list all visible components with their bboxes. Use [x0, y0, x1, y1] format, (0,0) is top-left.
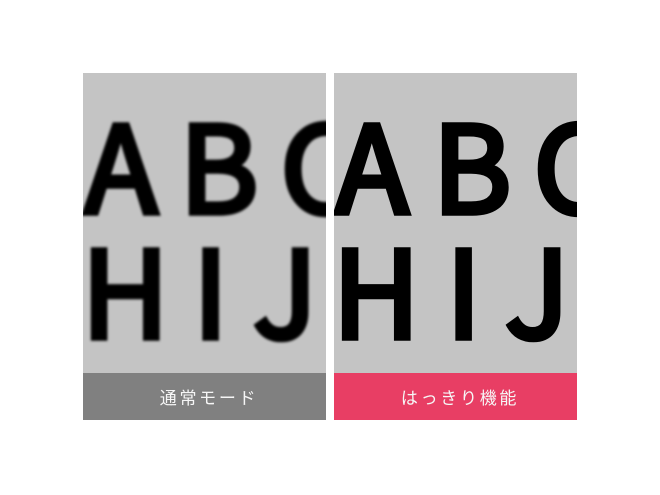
sharp letters: A [336, 74, 408, 248]
label: normal mode [83, 373, 326, 420]
blurred letters [83, 74, 326, 373]
sharp letters: I [446, 199, 481, 373]
sharp letters: B [432, 74, 511, 248]
label: normal mode: 通常モード [160, 384, 258, 409]
label: clear mode: はっきり機能 [401, 384, 519, 409]
panel: clear mode [334, 73, 577, 420]
panel: normal mode [83, 73, 326, 420]
blurred letters: B [180, 74, 258, 248]
sharp letters: J [505, 199, 569, 373]
sharp letters [334, 74, 577, 373]
blurred letters: I [193, 199, 228, 373]
sharp letters: H [334, 199, 420, 373]
label: clear mode [334, 373, 577, 420]
blurred letters: A [84, 74, 157, 248]
blurred letters: J [253, 199, 317, 373]
blurred letters: H [83, 199, 169, 373]
